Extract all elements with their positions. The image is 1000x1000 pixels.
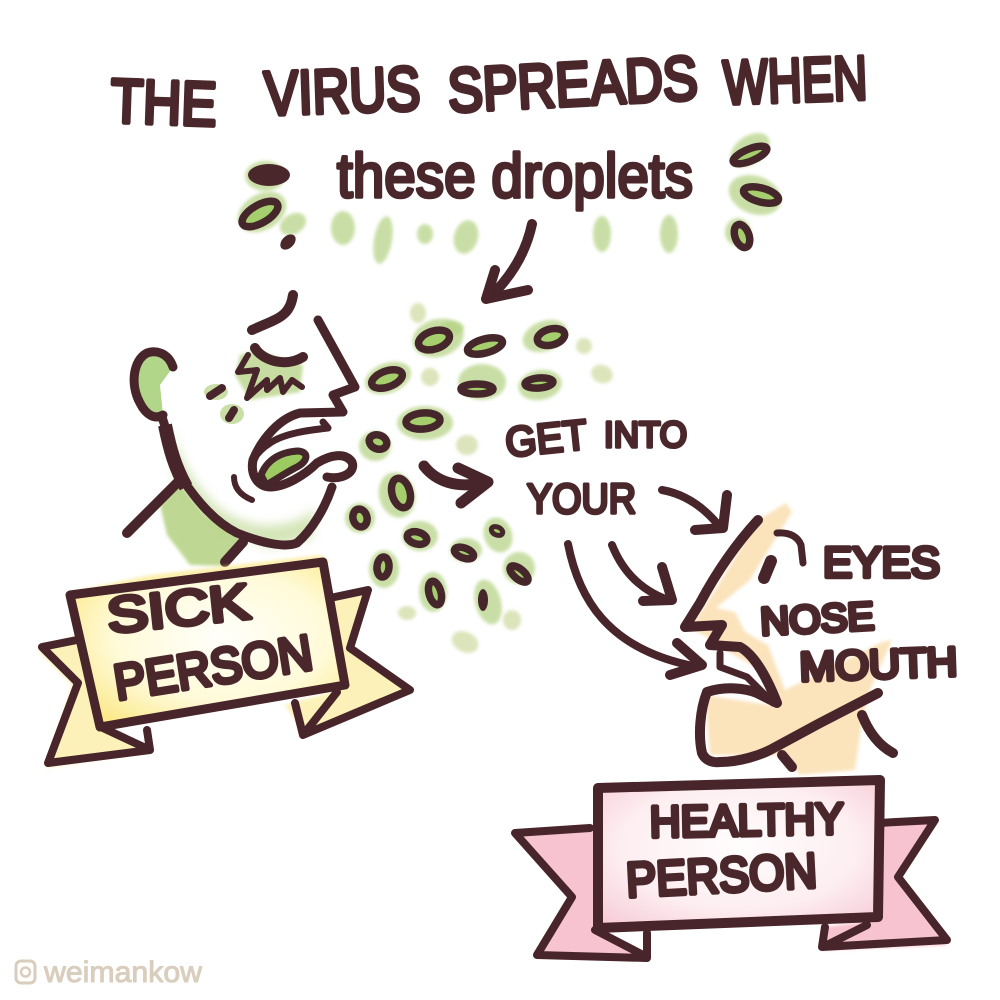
jaw line <box>162 417 332 545</box>
droplet <box>388 476 414 510</box>
droplet <box>406 530 428 546</box>
text: get into your: INTO <box>604 414 687 455</box>
title: WHEN <box>722 44 868 118</box>
droplet <box>731 222 753 250</box>
tongue <box>261 451 306 485</box>
inner mouth <box>720 653 773 703</box>
droplet <box>507 563 531 585</box>
face outline <box>685 520 878 762</box>
neck lines <box>782 715 893 767</box>
droplet <box>405 412 441 430</box>
text: get into your: YOUR <box>527 475 636 522</box>
spray droplets <box>345 303 615 657</box>
droplet <box>426 580 444 606</box>
droplet <box>367 432 389 452</box>
title: SPREADS <box>446 44 699 126</box>
banner text: SICK <box>104 573 252 644</box>
droplet <box>478 589 488 611</box>
ribbon tails <box>38 635 155 768</box>
banner: sick person <box>38 555 410 768</box>
droplet <box>248 164 290 186</box>
arrow: to eyes <box>662 490 727 530</box>
droplet <box>525 377 553 389</box>
droplet <box>416 326 452 354</box>
eye with green lashes <box>235 350 303 400</box>
neck lines <box>127 482 243 562</box>
droplet <box>535 326 567 348</box>
label: nose: NOSE <box>759 595 875 644</box>
nose and mouth <box>252 320 355 487</box>
droplet <box>490 525 504 537</box>
arrow: spray to text <box>424 466 488 503</box>
credit: instagram handle: weimankow <box>43 956 202 989</box>
title <box>110 44 868 140</box>
banner panel <box>598 780 880 928</box>
droplet <box>238 196 282 232</box>
arrow: to nose <box>612 545 672 601</box>
arrow: droplets down to spray <box>486 224 532 299</box>
eyebrow <box>252 295 293 330</box>
title: VIRUS <box>263 55 421 129</box>
droplet <box>376 557 390 577</box>
chin mark <box>234 477 252 500</box>
droplet <box>731 143 769 167</box>
label: mouth: MOUTH <box>799 639 958 690</box>
healthy person <box>685 503 893 775</box>
top droplets row <box>230 126 787 265</box>
eyebrow <box>777 533 803 563</box>
ribbon tails <box>515 825 647 958</box>
arrow: to mouth <box>568 544 702 675</box>
tears <box>204 384 228 400</box>
text: get into your <box>503 411 687 522</box>
droplet <box>461 384 493 394</box>
sick person <box>127 295 355 566</box>
ear <box>134 352 173 417</box>
banner: sick person: PERSON <box>110 624 316 711</box>
banner panel <box>70 562 345 727</box>
banner text: HEALTHY <box>649 795 844 847</box>
droplet <box>351 507 369 529</box>
droplet <box>369 366 405 392</box>
droplet <box>453 545 475 561</box>
subtitle: these droplets: these droplets <box>337 142 693 211</box>
droplet <box>742 184 780 206</box>
label: eyes: EYES <box>823 539 940 587</box>
skin shading <box>690 503 892 775</box>
green shading: neck and jaw <box>160 482 245 566</box>
droplet <box>277 231 299 253</box>
droplet <box>466 335 504 357</box>
eye <box>764 561 771 578</box>
banner: healthy person: PERSON <box>625 844 818 908</box>
banner: healthy person <box>515 780 947 958</box>
title: THE <box>110 67 218 140</box>
text: get into your: GET <box>503 411 589 466</box>
